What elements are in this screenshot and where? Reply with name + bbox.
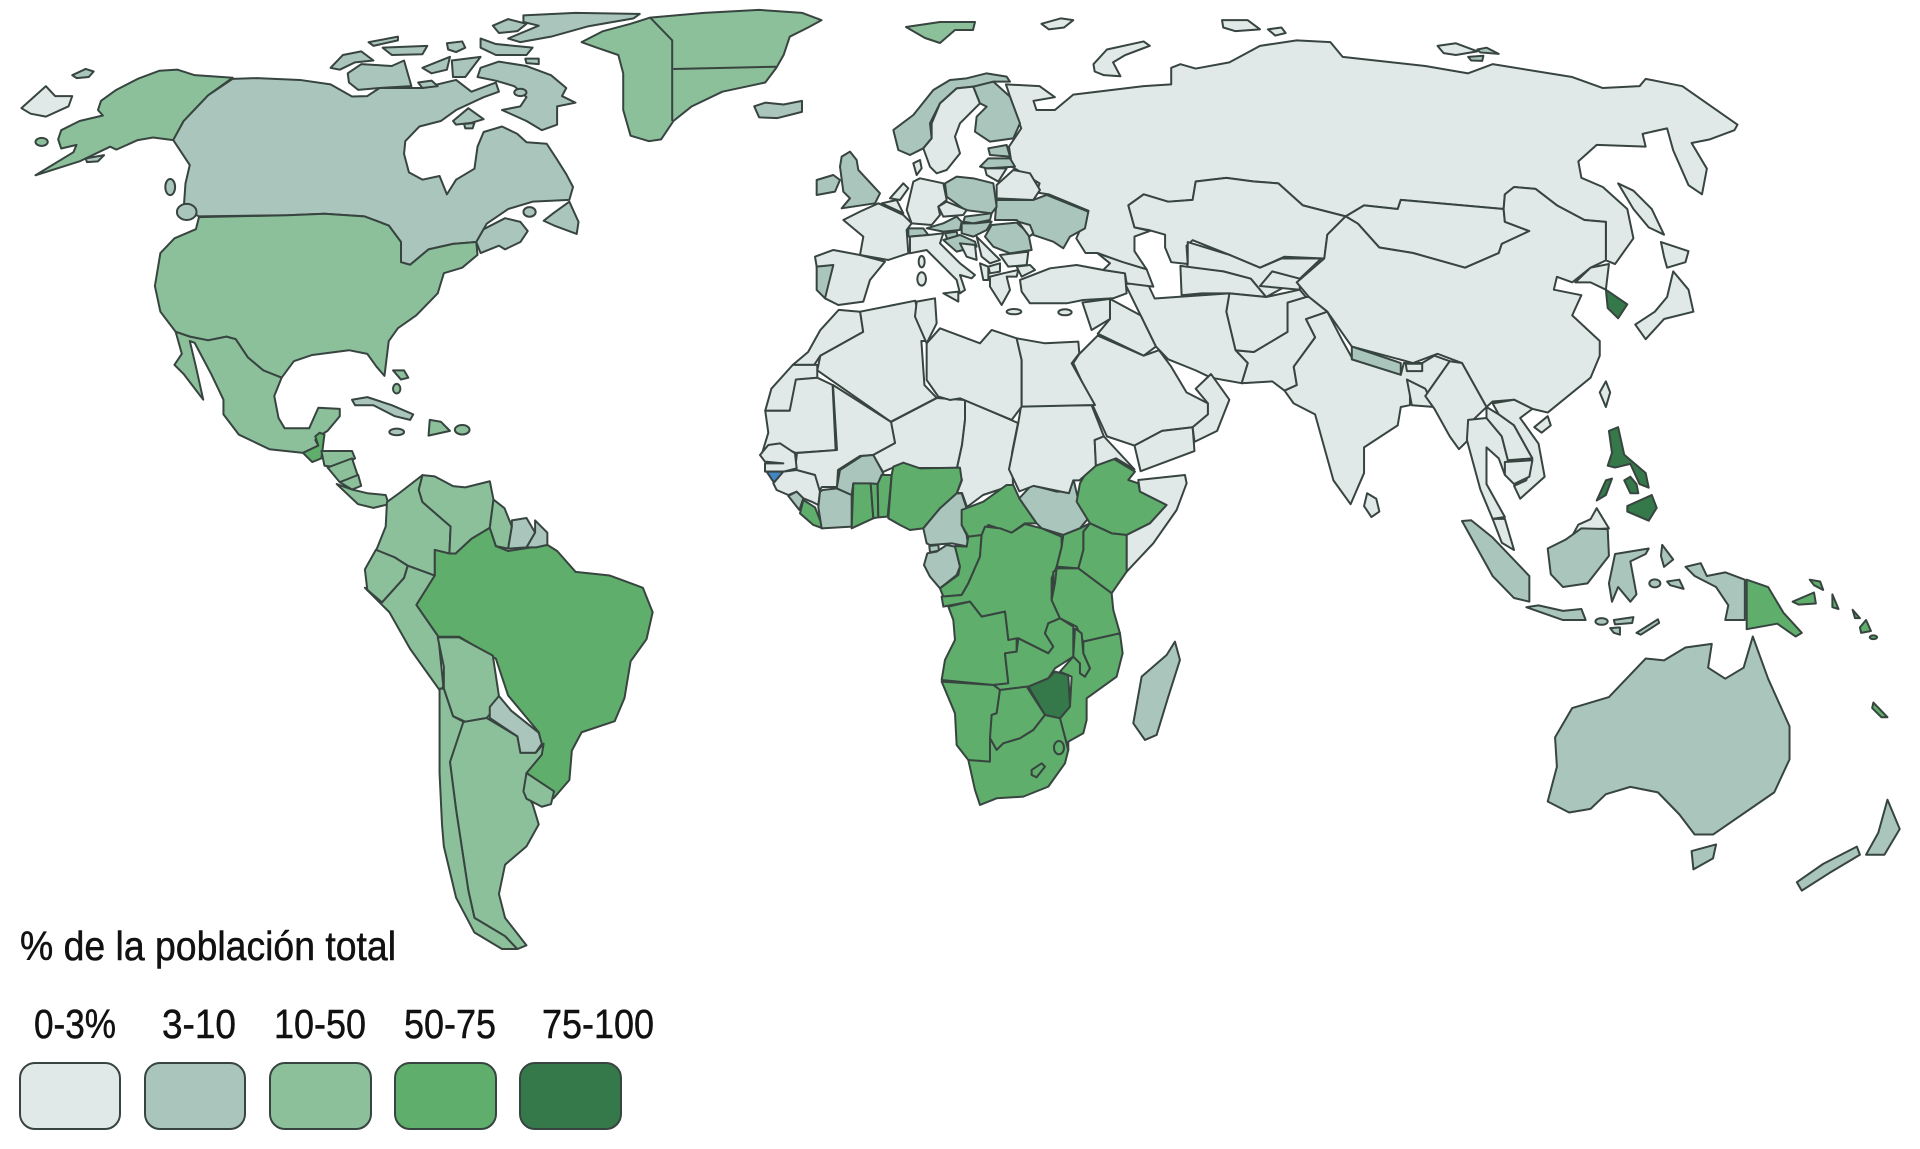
Gabon: [924, 545, 960, 588]
Guyana: [490, 500, 512, 549]
Malay peninsula: [1493, 519, 1514, 550]
Togo: [871, 483, 878, 518]
South Sudan: [1019, 478, 1088, 535]
Finland: [973, 82, 1020, 142]
Papua New Guinea: [1747, 580, 1802, 637]
Colombia: [376, 475, 451, 576]
legend item: 10-50: 10-50: [274, 1001, 366, 1047]
Iceland: [754, 101, 802, 118]
Uruguay: [523, 773, 554, 807]
Ghana: [852, 483, 873, 528]
region: Eurasia: [1006, 18, 1737, 550]
Poland: [945, 177, 997, 213]
legend item: 75-100: [520, 1001, 654, 1129]
Nigeria: [888, 463, 962, 530]
Egypt: [1017, 338, 1095, 407]
Tajikistan: [1260, 271, 1300, 290]
Lesotho: [1032, 763, 1045, 777]
Iraq: [1098, 299, 1156, 356]
Moldova: [1018, 222, 1033, 237]
Mongolia: [1346, 200, 1529, 268]
Suriname: [508, 518, 535, 549]
Benin: [878, 475, 892, 517]
Tanzania: [1052, 568, 1120, 642]
Kenya: [1078, 523, 1127, 593]
Ecuador: [365, 550, 408, 602]
Japan and Sakhalin: [1618, 183, 1693, 339]
Guinea-Bissau: [767, 472, 785, 482]
Cambodia: [1505, 460, 1532, 484]
Central African Republic: [962, 485, 1037, 537]
North Korea: [1575, 264, 1609, 290]
Caribbean islands: [352, 370, 470, 436]
Portugal: [817, 265, 833, 298]
Belarus: [997, 170, 1040, 200]
Malaysian Borneo: [1551, 508, 1609, 554]
France: [843, 203, 912, 260]
Mali: [795, 385, 895, 492]
legend item: 50-75: 50-75: [404, 1001, 496, 1047]
Philippines: [1597, 427, 1657, 521]
Senegal: [760, 443, 797, 472]
Sweden: [923, 87, 980, 173]
Bangladesh: [1407, 380, 1434, 407]
Chukotka fragment: [21, 86, 72, 117]
South Korea: [1606, 290, 1627, 318]
legend item: 75-100: 75-100: [542, 1001, 654, 1047]
Zambia: [993, 618, 1073, 690]
Mexico: [174, 332, 340, 453]
Argentina: [450, 718, 544, 949]
Indonesian islands: [1462, 520, 1745, 635]
Myanmar: [1425, 361, 1486, 449]
Eritrea: [1095, 436, 1134, 469]
region: Sahel borders: [795, 22, 1018, 507]
legend: [20, 923, 654, 1129]
Canada: [173, 78, 573, 265]
Eswatini: [1054, 741, 1064, 754]
Central America: [303, 433, 389, 508]
Alaska: [36, 70, 233, 175]
Mozambique: [1060, 633, 1123, 750]
Peru: [365, 566, 443, 692]
Sudan: [1009, 405, 1104, 493]
Malawi: [1073, 628, 1090, 677]
Svalbard: [906, 22, 975, 43]
legend item: 50-75: [395, 1001, 496, 1129]
United Kingdom: [840, 152, 880, 208]
Zimbabwe: [1028, 672, 1070, 718]
Ethiopia: [1077, 457, 1167, 535]
region: Europe and Mediterranean: [815, 73, 1153, 420]
legend item: 3-10: [145, 1001, 245, 1129]
Paraguay: [490, 696, 542, 753]
region: North America and Greenland: [21, 10, 937, 508]
Yemen: [1134, 427, 1194, 471]
Afghanistan: [1226, 290, 1306, 352]
Slovakia: [963, 213, 992, 223]
Russia: [1006, 40, 1737, 270]
Estonia: [988, 145, 1010, 157]
China: [1297, 187, 1606, 413]
Somalia: [1127, 475, 1187, 572]
Belgium: [882, 200, 903, 213]
Italy: [910, 233, 975, 293]
Turkmenistan: [1180, 266, 1266, 297]
Pacific islands: [1793, 580, 1887, 717]
Madagascar: [1133, 642, 1180, 740]
Burkina Faso: [837, 455, 883, 495]
Angola: [942, 602, 1017, 685]
Uzbekistan: [1187, 242, 1321, 297]
Venezuela: [419, 475, 493, 553]
Liberia: [800, 500, 823, 528]
Uganda: [1057, 523, 1090, 568]
Romania: [985, 223, 1032, 253]
Aleutian island: [36, 138, 48, 146]
Tunisia: [915, 298, 937, 343]
Equatorial Guinea: [929, 545, 939, 552]
Greenland: [582, 10, 822, 141]
legend item: 0-3%: [20, 1001, 120, 1129]
region: northern South America: [365, 475, 653, 798]
Hungary: [962, 222, 992, 237]
Niger: [873, 398, 965, 472]
Brazil: [416, 528, 653, 798]
Lithuania: [985, 168, 1007, 182]
Norway: [893, 73, 1010, 155]
Vietnam: [1493, 400, 1545, 499]
Canadian islands: [72, 13, 640, 253]
Latvia: [980, 158, 1015, 168]
legend item: 0-3%: 0-3%: [34, 1001, 116, 1047]
Chile: [440, 689, 517, 949]
Bhutan: [1406, 364, 1422, 371]
Republic of Congo: [940, 533, 982, 597]
Oman: [1193, 374, 1229, 442]
Germany: [907, 178, 947, 225]
Iran: [1125, 282, 1248, 383]
India: [1284, 312, 1450, 504]
Balkan states: [943, 232, 1035, 305]
French Guiana: [527, 520, 547, 547]
Botswana: [990, 687, 1045, 750]
Czechia: [938, 202, 967, 217]
legend item: 3-10: 3-10: [162, 1001, 236, 1047]
Turkey: [1020, 265, 1127, 303]
Bolivia: [438, 637, 499, 722]
Maghreb and West Sahara: [762, 301, 937, 453]
Asian islands: [1041, 18, 1610, 517]
Saudi Arabia: [1073, 336, 1208, 446]
Sierra Leone: [788, 492, 803, 510]
Pakistan: [1235, 297, 1327, 391]
DR Congo: [942, 524, 1062, 653]
Netherlands: [890, 183, 908, 200]
Thailand: [1467, 418, 1508, 519]
New Zealand: [1797, 800, 1900, 891]
Cameroon: [923, 493, 968, 547]
Mediterranean islands: [917, 256, 1072, 315]
Laos: [1486, 407, 1532, 460]
Rwanda and Burundi: [1053, 570, 1062, 592]
Austria: [927, 217, 962, 232]
region: Africa: [760, 443, 1187, 805]
region: southern South America: [438, 637, 554, 949]
Ivory Coast: [818, 488, 852, 528]
Ukraine: [995, 195, 1088, 248]
Guinea: [773, 470, 820, 505]
United States: [155, 214, 478, 378]
Switzerland: [908, 228, 928, 237]
Ireland: [817, 175, 840, 195]
Australia: [1548, 637, 1790, 835]
Libya: [927, 328, 1022, 420]
Kazakhstan: [1128, 178, 1346, 268]
legend title: % de la población total: [20, 923, 396, 969]
Spain: [815, 250, 885, 305]
legend item: 10-50: [270, 1001, 371, 1129]
Nepal: [1352, 347, 1401, 375]
Tasmania: [1692, 844, 1716, 869]
Bulgaria: [1000, 252, 1028, 267]
Caucasus: [1098, 253, 1153, 287]
Syria: [1082, 299, 1110, 330]
Chad: [957, 400, 1018, 507]
Namibia: [942, 682, 1000, 763]
South Africa: [968, 715, 1068, 805]
Denmark: [913, 160, 922, 175]
region: Indonesia and Oceania: [1462, 508, 1900, 891]
